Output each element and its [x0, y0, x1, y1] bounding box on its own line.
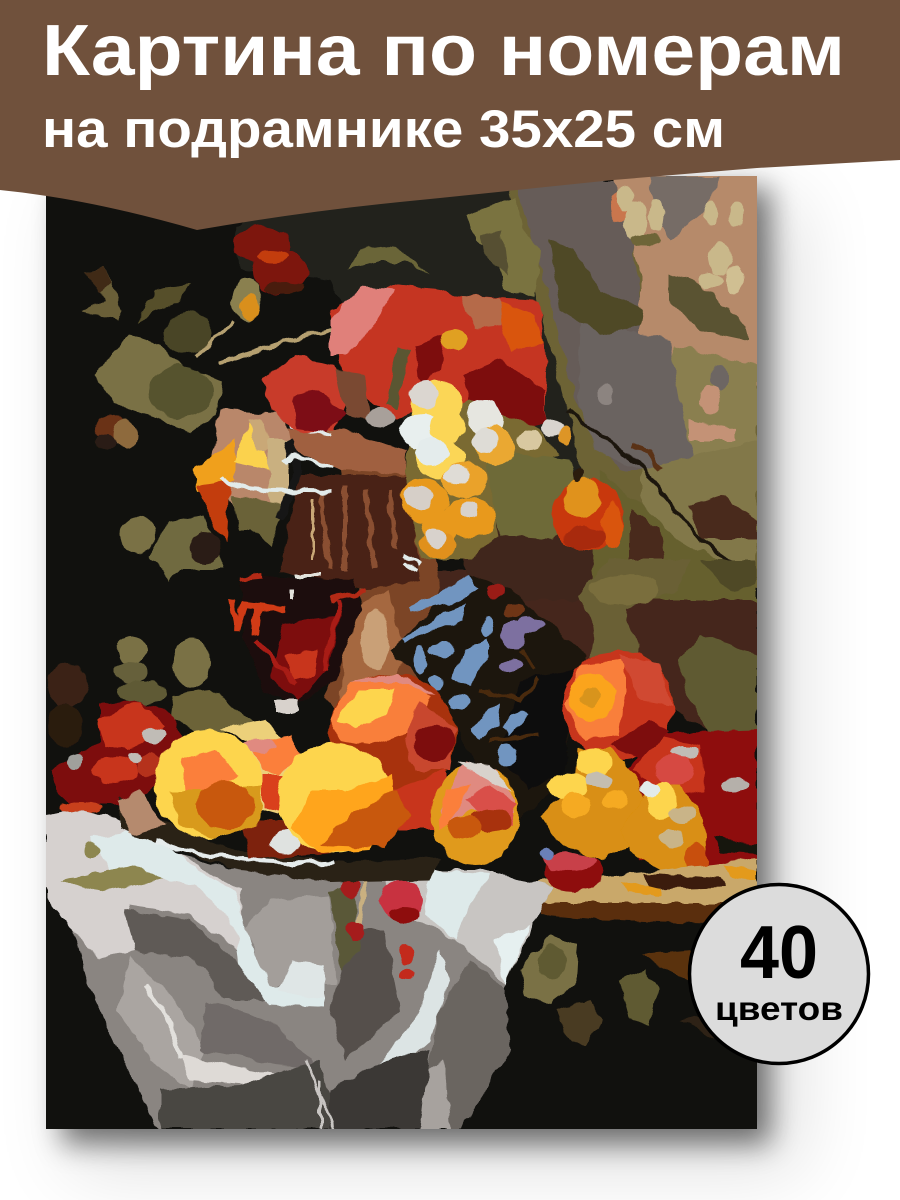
cloth [46, 809, 554, 1129]
table right [515, 860, 757, 1050]
background: upper right foliage [235, 170, 770, 760]
upper leaves [47, 197, 540, 747]
badge: 40 colours: цветов [715, 990, 843, 1027]
badge: 40 colours [690, 884, 868, 1064]
top berries [233, 226, 307, 294]
pale grapes [400, 380, 582, 560]
blue grape bunch [390, 573, 587, 817]
peaches [154, 672, 519, 865]
title: Картина по номерам [42, 11, 845, 91]
painting: fruit still life [46, 170, 770, 1129]
subtitle: на подрамнике 35х25 см [42, 100, 725, 159]
left red berries [53, 700, 185, 814]
plate [118, 790, 440, 882]
right fruit and grapes [540, 650, 757, 880]
wine glass [223, 425, 420, 706]
banner [0, 0, 900, 230]
orange fruit [552, 468, 624, 551]
lower right leaves [577, 560, 757, 750]
red fruit cluster [263, 285, 547, 435]
badge: 40 colours: 40 [740, 910, 818, 994]
canvas shadow [62, 188, 800, 1170]
copper urn [193, 410, 440, 720]
bottom berry [542, 849, 604, 891]
